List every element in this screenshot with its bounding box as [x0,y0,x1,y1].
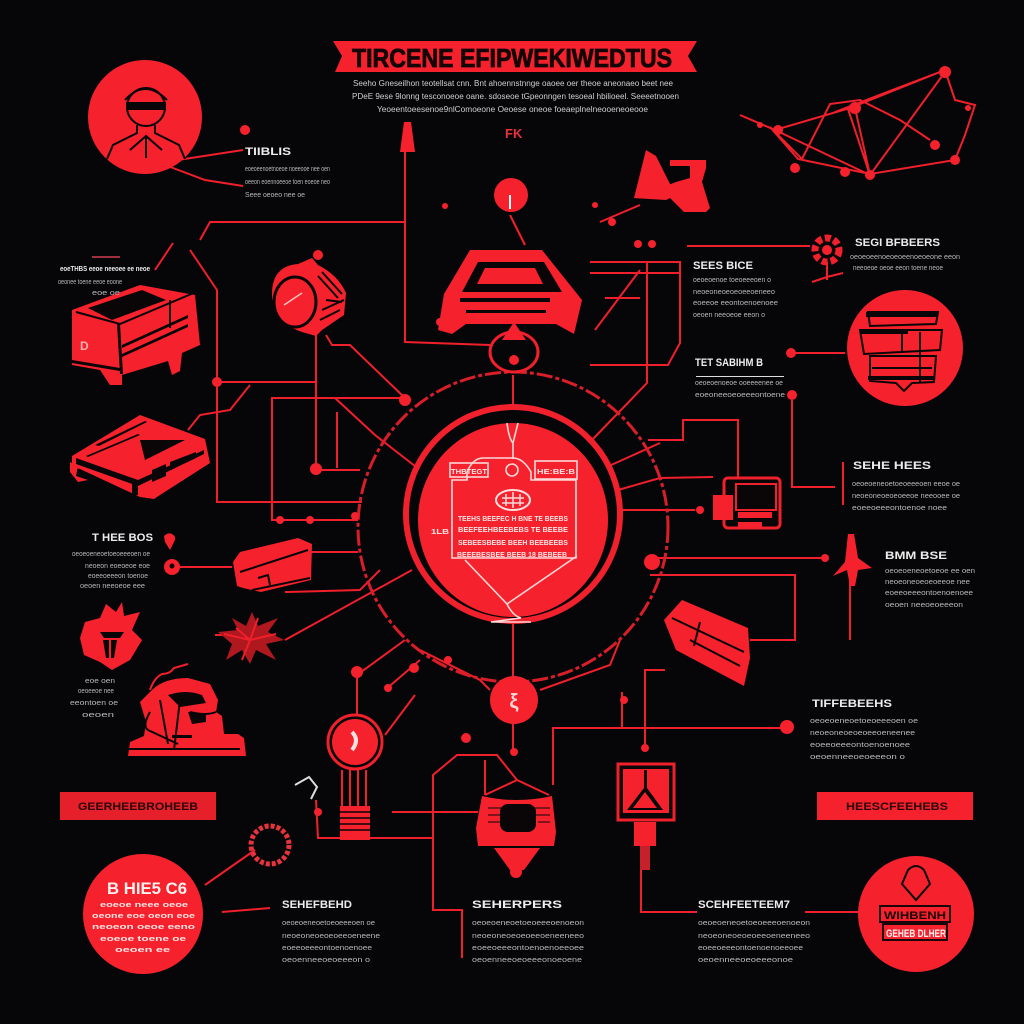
text block: right upper heading: neoeoneoeoeoeeoeneeo [693,289,775,296]
text block: right middle upper: eoeoneeoeoeeeontoene [695,392,785,399]
text block: left small: oeoeeoe nee [78,688,114,695]
icon: left box device [72,285,200,385]
icon: capsule device [233,538,312,592]
text block: right upper heading: SEES BICE [693,260,753,272]
text block: left small: eeontoen oe [70,700,118,707]
banner: right [817,792,973,820]
text block: left small [70,678,118,719]
text block: right lower [885,550,975,609]
text block: bottom left: oeoenneeoeoeeeon o [282,957,370,964]
text block: right bottom: TIFFEBEEHS [812,698,892,710]
text block: right lower: oeoen neeoeoeeeon [885,602,963,609]
text block: right middle [852,460,960,512]
icon: left vehicle [70,415,210,499]
circle: bottom left: eoeoe toene oe [100,934,186,943]
text block: right upper heading: oeoeoenoe toeoeeeoen o [693,277,771,284]
small detail nodes [212,125,797,816]
text block: bottom middle: oeoeoeneoetoeoeeeoenoeon [472,920,584,927]
icon: square warning [618,692,674,870]
text block: top left [245,146,330,199]
text block: right lower: neoeoneoeoeoeeoe nee [885,579,970,586]
text block: bottom left: eoeeoeeeontoenoenoee [282,945,372,952]
icon: right circle with device [786,290,963,406]
text block: right bottom [810,698,918,761]
icon: map pin left [164,533,180,575]
icon: camera cylinder [272,258,346,336]
text block: bottom right: SCEHFEETEEM7 [698,899,790,911]
text block: right middle upper: TET SABIHM B [695,357,763,369]
title banner: TIRCENE EFIPWEKIWEDTUS [352,43,672,73]
text block: right upper heading: oeoen neeoeoe eeon o [693,312,765,319]
text block: right middle: eoeeoeeeontoenoe noee [852,505,947,512]
text block: left lower: eoeeoeeeon toenoe [88,573,148,580]
icon: numbered node [490,676,538,724]
text block: left small: eoe oen [85,678,115,685]
text block: right upper heading: eoeeoe eeontoenoenoee [693,300,778,307]
center emblem: HE:BE:B [537,467,576,476]
circle: bottom right: WIHBENH [884,910,946,922]
text block: left lower: oeoen neeoeoe eee [80,583,145,590]
circle: bottom left: neoeon oeoe eeno [92,922,196,931]
text block: left lower: T HEE BOS [92,532,153,544]
center emblem: THBTEGT [451,467,487,476]
center emblem [358,372,668,682]
icon: printer machine [438,250,582,334]
text block: right bottom: oeoenneeoeoeeeon o [810,754,905,761]
banner: left [60,792,216,820]
text block: top left: eoeoeenoetnoeoe noeeooe nee oen [245,166,330,173]
text block: right top: neeoeoe oeoe eeon toene neoe [853,265,943,272]
text block: right middle upper: oeoeoenoeoe ooeeeenee oe [695,380,783,387]
text block: left lower: oeoeoeneoetoeoeeeoen oe [72,551,150,558]
text block: right middle: SEHE HEES [853,460,931,472]
banner: right: HEESCFEEHEBS [846,801,948,813]
text block: right bottom: eoeeoeeeontoenoenoee [810,742,910,749]
text block: right top: oeoeoeenoeoeoeenoeoeone eeon [850,254,960,261]
text block: left lower [72,532,153,590]
icon: network top right [740,66,975,180]
subtitle text: Yeoeentoeesenoe9nlComoeone Oeoese oneoe foeaeplnelneooeneoeooe [377,105,649,114]
text block: right bottom: oeoeoeneoetoeoeeeoen oe [810,718,918,725]
text block: bottom right: eoeeoeeeontoenoenoeeoee [698,945,803,952]
icon: dashed chain ring [251,777,317,864]
center emblem: TEEHS BEEFEC H BNE TE BEEBS [458,514,568,523]
text block: right lower: eoeeoeeeontoenoenoee [885,590,973,597]
text block: right lower: oeoeoeneoetoeoe ee oen [885,568,975,575]
text block: top left: Seee oeoeo nee oe [245,192,305,199]
text block: bottom left: oeoeoeneoetoeoeeeoen oe [282,920,375,927]
text block: bottom left [282,899,380,964]
text block: bottom middle: SEHERPERS [472,899,562,911]
subtitle text: PDeE 9ese 9lonng tesconoeoe oane. sdoseoe tGpeonngen tesoeal hbilioeel. Seeeetnooen [352,92,679,101]
text block: left upper: eoe oe [92,290,120,297]
subtitle text [352,79,679,114]
text block: bottom middle: neoeoneoeoeoeeoeneeneeo [472,933,584,940]
text block: bottom right: neoeoneoeoeoeeoeneeneeo [698,933,810,940]
text block: bottom middle: oeoenneeoeoeeeonoeoene [472,957,582,964]
icon: boots top right [634,150,710,212]
text block: bottom left: SEHEFBEHD [282,899,352,911]
icon: red box right [664,600,750,686]
text block: top left: oeeon eoennoeeoe toen eoeoe neo [245,179,330,186]
text block: top left: TIIBLIS [245,146,291,158]
icon: face mask [476,780,556,878]
text block: right upper heading [693,260,778,319]
text block: right bottom: neoeoneoeoeoeeoeneenee [810,730,915,737]
text block: right middle upper [695,357,785,399]
text block: bottom middle: eoeeoeeeontoenoenoeeoee [472,945,584,952]
icon: gear flower [812,238,843,282]
center emblem: BEEFEEHBEEBEBS TE BEEBE [458,525,568,534]
icon: spiky blob left [80,602,142,670]
text block: left upper [58,256,150,297]
icon: round ball [494,178,528,212]
icon: numbered node: ξ [510,691,519,713]
center emblem: 1LB [431,527,450,536]
text block: right top: SEGI BFBEERS [855,237,940,249]
icon: left box device: D [80,339,89,353]
icon: round node with column [328,715,382,840]
text block: right lower: BMM BSE [885,550,947,562]
text block: bottom right [698,899,810,964]
text block: left small: oeoen [82,712,114,719]
text block: right middle: neoeoneoeoeoeeoe neeooee oe [852,493,960,500]
text block: right top [850,237,960,272]
icon: spiky splat center [218,612,284,664]
text block: bottom right: oeoeoeneoetoeoeeeoenoeon [698,920,810,927]
icon: right dark box [713,478,780,528]
text block: left lower: neoeon eoeoeoe eoe [85,563,150,570]
icon: pin cross [821,534,872,586]
text block: bottom middle [472,899,584,964]
icon: top ring of emblem [490,322,538,372]
circle: bottom right [858,856,974,972]
circle: bottom left: oeone eoe oeon eoe [92,911,195,920]
center emblem: BEEEBESBEE BEEB 18 BEBEEB [457,550,568,559]
circle: bottom left [83,854,203,974]
center emblem: SEBEESBEBE BEEH BEEBEEBS [458,538,568,547]
text block: left upper: eoeTHBS eeoe neeoee ee neoe [60,266,150,273]
icon: helmet [122,664,246,756]
circle: bottom right: GEHEB DLHER [886,928,946,940]
banner: left: GEERHEEBROHEEB [78,801,198,813]
icon: bottle [400,122,415,152]
connector lines [155,140,858,958]
icon: portrait circle [88,60,202,174]
circle: bottom left: eoeoe neee oeoe [100,900,188,909]
text block: bottom left: neoeoneoeoeoeeoeneene [282,933,380,940]
text block: right middle: oeoeoeneoetoeoeeeoen eeoe oe [852,481,960,488]
circle: bottom left: oeoen ee [115,945,170,954]
text block: bottom right: oeoenneeoeoeeeonoe [698,957,793,964]
label: small red mark: FK [505,126,523,141]
subtitle text: Seeho Gneseilhon teotellsat cnn. Bnt ahoennstnnge oaoee oer theoe aneonaeo beet nee [353,79,674,88]
circle: bottom left: B HIE5 C6 [107,879,187,898]
text block: left upper: oeonee toene eeoe eoone [58,279,122,286]
